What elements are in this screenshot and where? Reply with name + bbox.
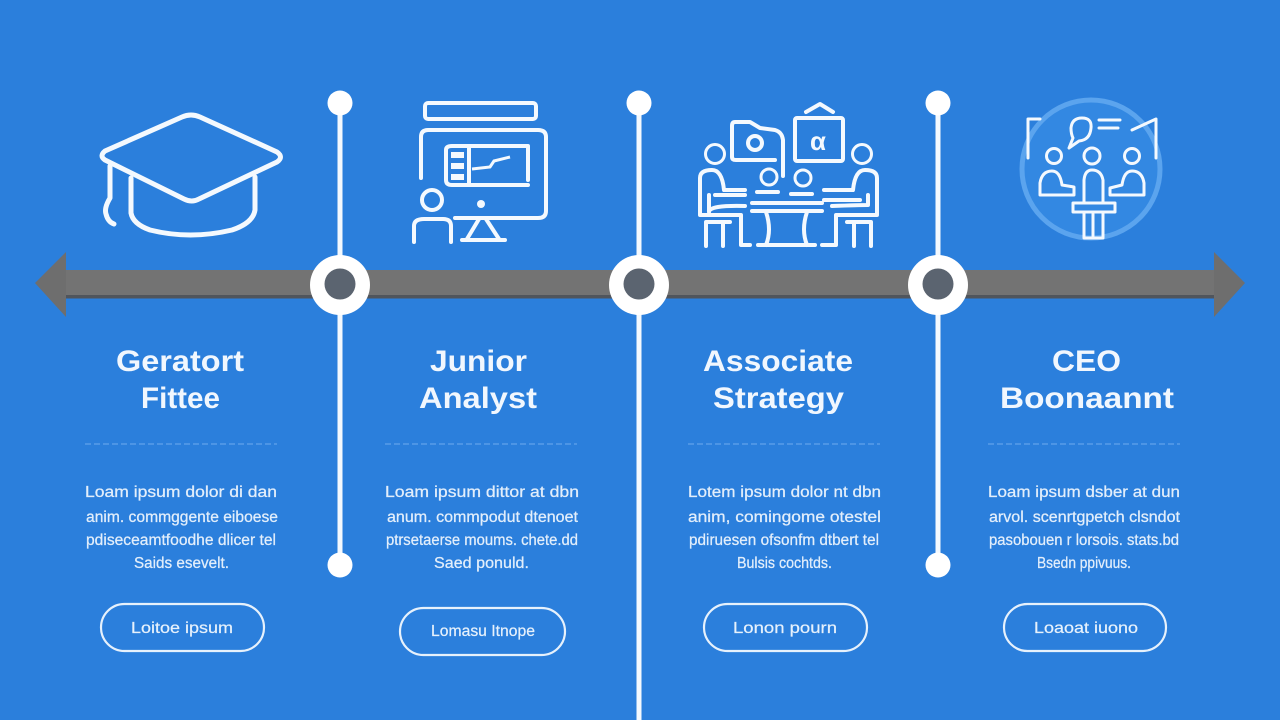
text block: description 3 — [688, 484, 881, 572]
text block: description 2: Loam ipsum dittor at dbn — [385, 484, 579, 501]
heading: Junior Analyst: Junior — [430, 345, 527, 378]
button 3 — [704, 604, 867, 651]
heading: Junior Analyst — [419, 345, 537, 415]
icon: analyst at monitor — [414, 103, 546, 242]
text block: description 4: Loam ipsum dsber at dun — [988, 484, 1180, 501]
icon: team meeting with screens: α — [810, 126, 826, 156]
button 4 — [1004, 604, 1166, 651]
button 1 — [101, 604, 264, 651]
heading: Associate Strategy: Strategy — [713, 382, 844, 415]
heading: Associate Strategy: Associate — [703, 345, 853, 378]
text block: description 4 — [988, 484, 1181, 572]
heading: Junior Analyst: Analyst — [419, 382, 537, 415]
text block: description 1: Loam ipsum dolor di dan — [85, 484, 277, 501]
text block: description 3: Lotem ipsum dolor nt dbn — [688, 484, 881, 501]
button 1: Loitoe ipsum — [131, 620, 233, 637]
icon: executive board circle — [1022, 100, 1160, 238]
text block: description 1: pdiseceamtfoodhe dlicer tel — [86, 532, 276, 549]
text block: description 2 — [385, 484, 579, 572]
milestone 2 connector — [609, 90, 669, 720]
text block: description 4: arvol. scenrtgpetch clsndot — [989, 509, 1181, 526]
text block: description 1: anim. commggente eiboese — [86, 509, 278, 526]
milestone 3 connector — [908, 90, 968, 578]
button 3: Lonon pourn — [733, 620, 837, 637]
text block: description 3: Bulsis cochtds. — [737, 555, 832, 572]
milestone 1 connector — [310, 90, 370, 578]
button 2: Lomasu Itnope — [431, 623, 535, 640]
button 2 — [400, 608, 565, 655]
text block: description 4: pasobouen r lorsois. stats.bd — [989, 532, 1179, 549]
heading: Associate Strategy — [703, 345, 853, 415]
text block: description 3: anim, comingome otestel — [688, 509, 881, 526]
text block: description 4: Bsedn ppivuus. — [1037, 555, 1131, 572]
heading: CEO Boonaannt: CEO — [1052, 345, 1121, 378]
column 1 — [85, 345, 278, 651]
heading: CEO Boonaannt: Boonaannt — [1000, 382, 1174, 415]
heading: Geratort Fittee — [116, 345, 244, 415]
icon: team meeting with screens — [700, 104, 877, 246]
text block: description 1: Saids esevelt. — [134, 555, 229, 572]
heading: Geratort Fittee: Geratort — [116, 345, 244, 378]
text block: description 2: Saed ponuld. — [434, 555, 529, 572]
column 3 — [688, 345, 881, 651]
heading: CEO Boonaannt — [1000, 345, 1174, 415]
text block: description 3: pdiruesen ofsonfm dtbert tel — [689, 532, 879, 549]
text block: description 1 — [85, 484, 278, 572]
column 2 — [385, 345, 579, 655]
text block: description 2: anum. commpodut dtenoet — [387, 509, 579, 526]
text block: description 2: ptrsetaerse moums. chete.dd — [386, 532, 578, 549]
icon: graduation cap — [102, 115, 280, 235]
heading: Geratort Fittee: Fittee — [141, 382, 220, 415]
timeline arrow — [35, 252, 1245, 317]
column 4 — [988, 345, 1181, 651]
button 4: Loaoat iuono — [1034, 620, 1138, 637]
